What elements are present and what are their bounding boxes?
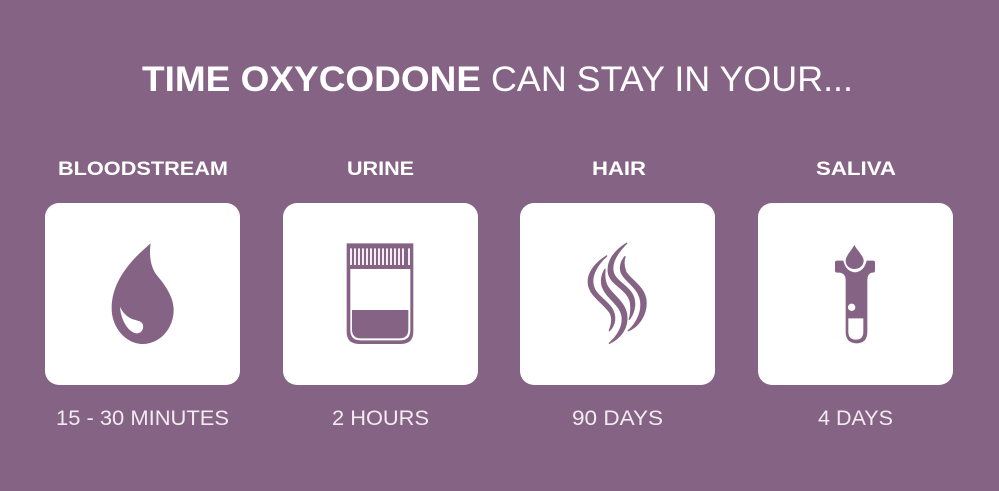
card: bloodstream xyxy=(45,203,240,385)
icon: blood drop xyxy=(112,243,174,344)
heading: urine: URINE xyxy=(347,158,414,180)
card: hair xyxy=(520,203,715,385)
heading: hair: HAIR xyxy=(592,158,646,180)
title: TIME OXYCODONE xyxy=(142,60,481,99)
icon: saliva test swab xyxy=(835,245,875,343)
card: urine xyxy=(283,203,478,385)
panel: saliva xyxy=(758,158,953,430)
title: CAN STAY IN YOUR... xyxy=(491,60,853,99)
panel: urine xyxy=(283,158,478,430)
icon: hair strands xyxy=(588,243,646,343)
value: hair: 90 DAYS xyxy=(572,407,663,430)
panel: hair xyxy=(520,158,715,430)
value: saliva: 4 DAYS xyxy=(818,407,893,430)
heading: bloodstream: BLOODSTREAM xyxy=(58,158,228,180)
value: bloodstream: 15 - 30 MINUTES xyxy=(56,407,229,430)
panel: bloodstream xyxy=(45,158,240,430)
card: saliva xyxy=(758,203,953,385)
icon: urine jar xyxy=(347,243,413,344)
value: urine: 2 HOURS xyxy=(332,407,429,430)
heading: saliva: SALIVA xyxy=(816,158,896,180)
title xyxy=(142,60,853,99)
